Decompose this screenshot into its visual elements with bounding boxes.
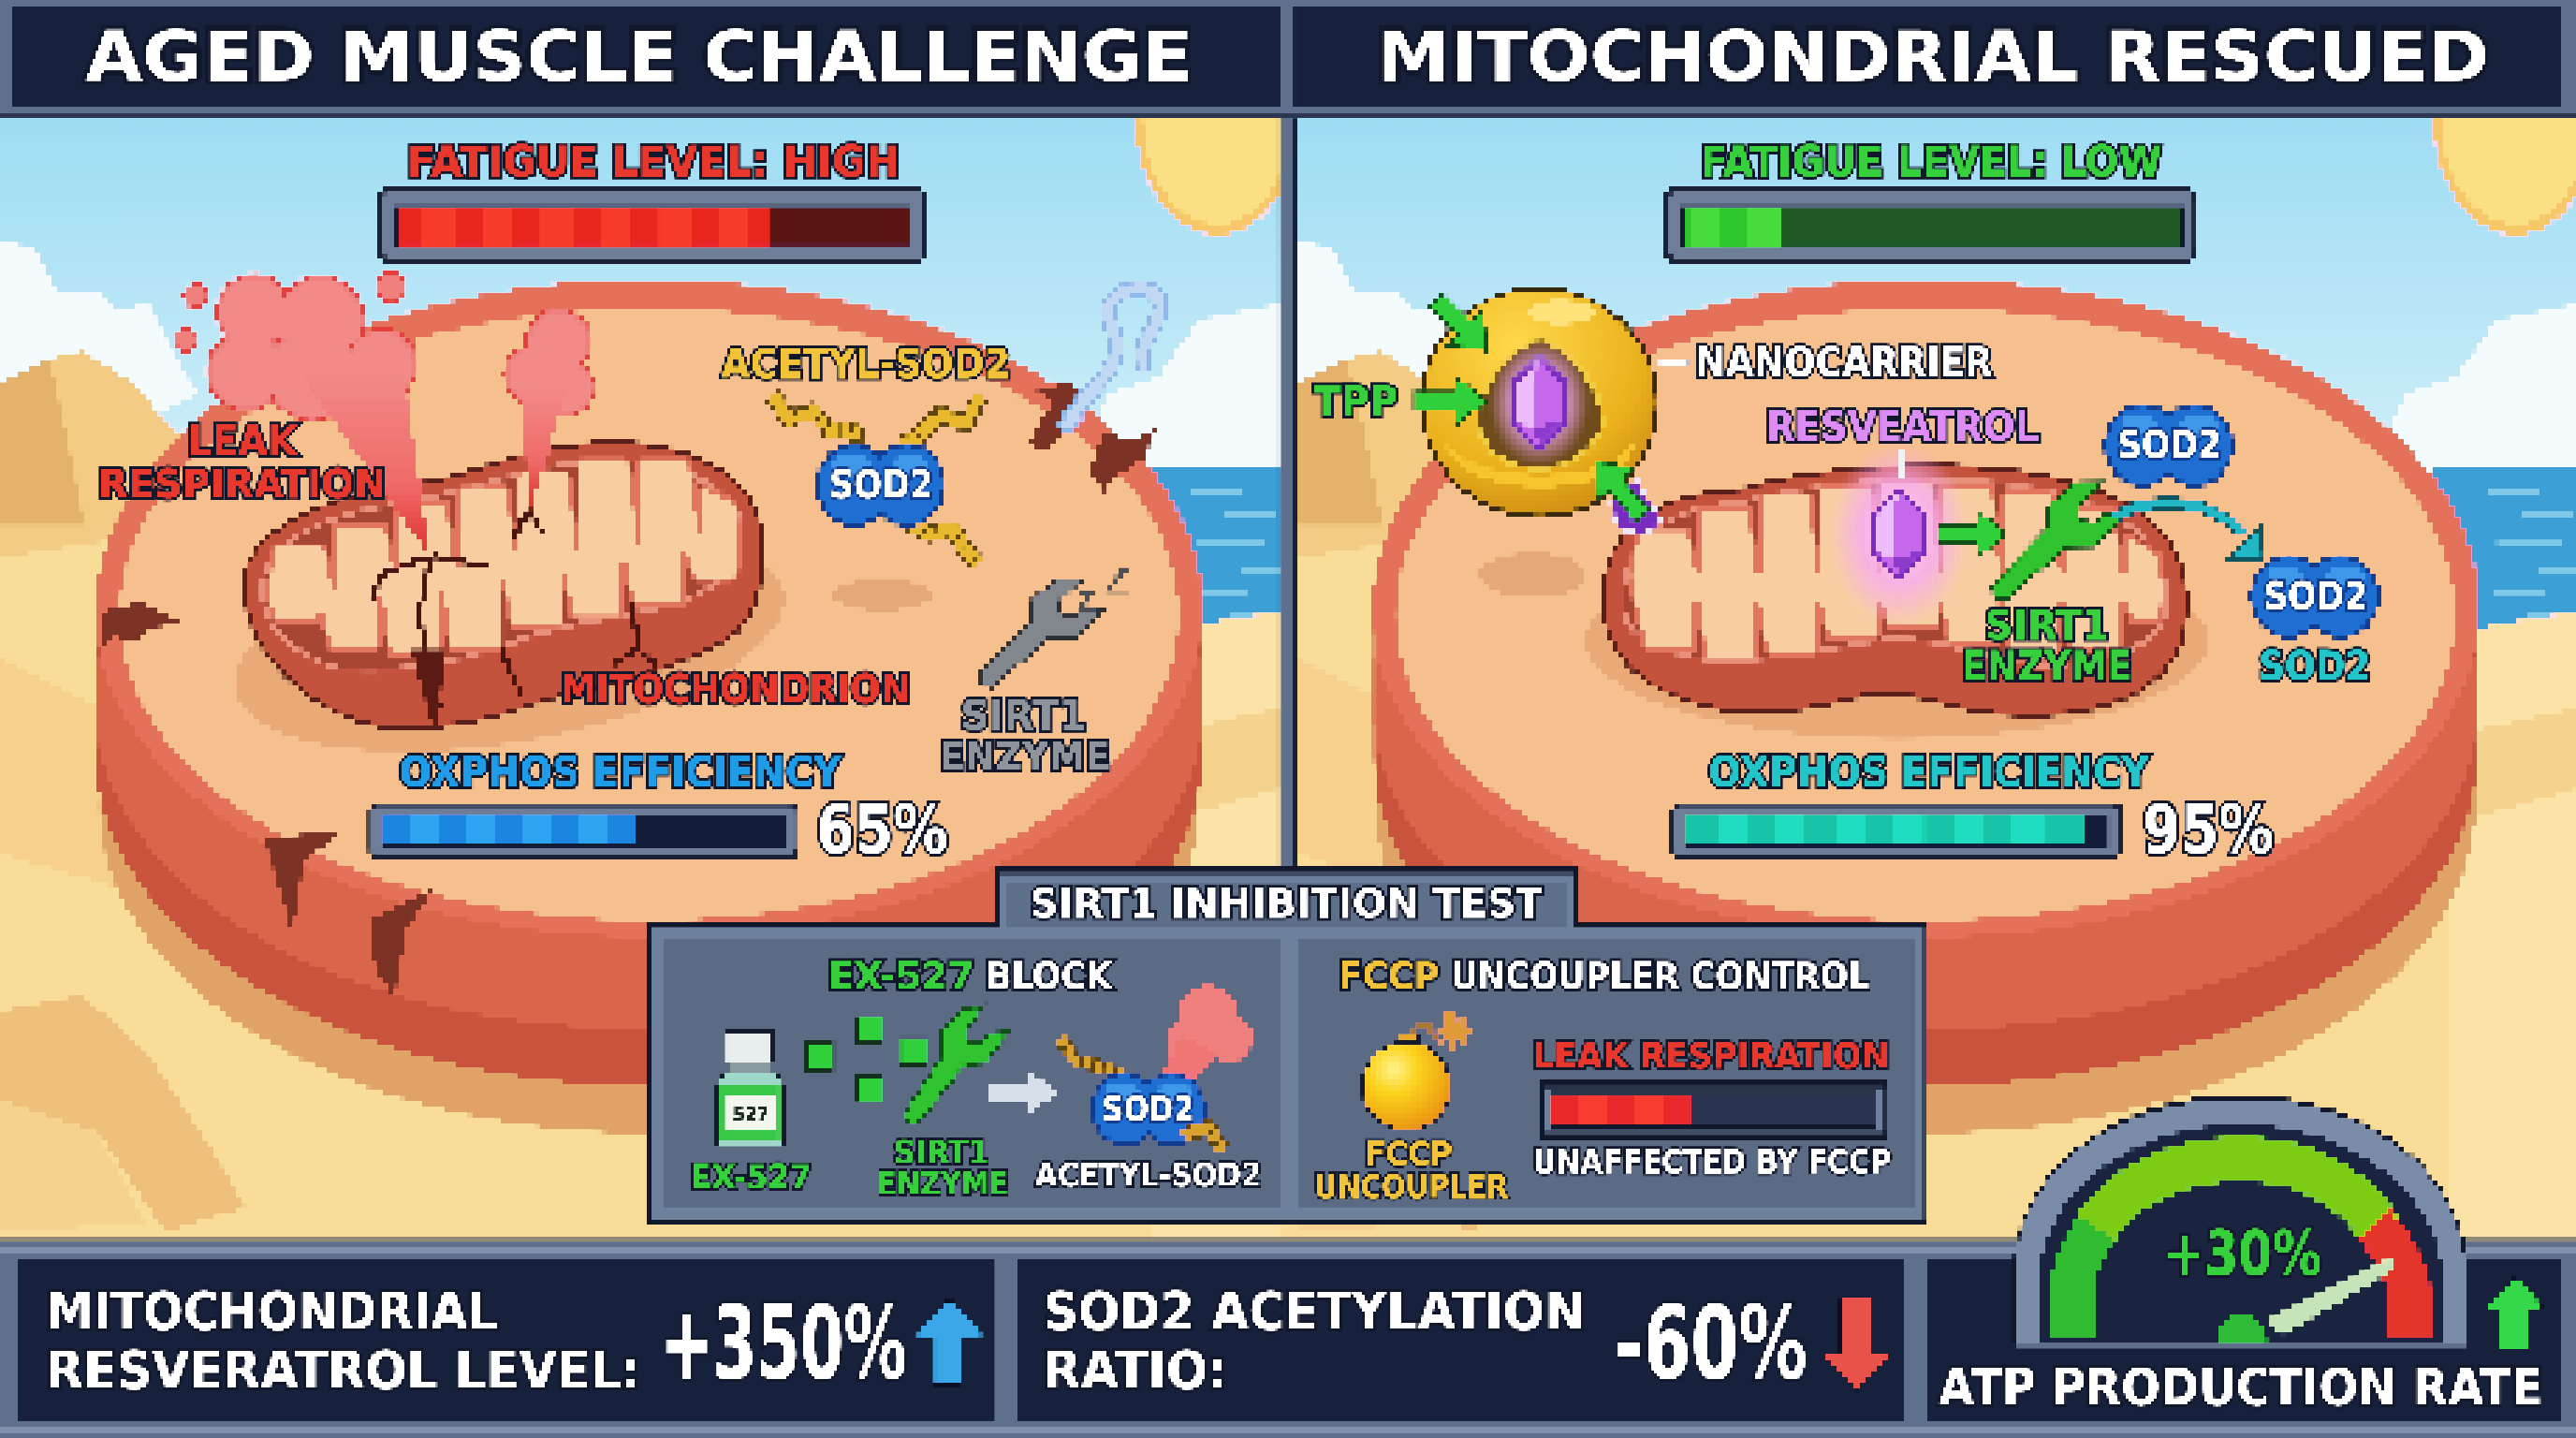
label: TPP: TPP [1314, 378, 1398, 426]
title: aged muscle challenge: AGED MUSCLE CHALLENGE [85, 18, 1193, 97]
stat: ratio: RATIO: [1043, 1341, 1227, 1401]
stat value: -60%: -60% [1615, 1284, 1808, 1403]
label: FCCP under bomb: FCCP [1365, 1135, 1453, 1173]
icon: blue vapor wisp [1068, 288, 1160, 424]
heading: FCCP: FCCP [1339, 955, 1439, 999]
stat: mitochondrial: MITOCHONDRIAL [46, 1282, 498, 1343]
icon: gold nanocarrier with crystal [1414, 282, 1689, 534]
icon: FCCP bomb [1360, 1010, 1473, 1132]
heading: block: BLOCK [986, 955, 1114, 999]
label: OXPHOS left: OXPHOS EFFICIENCY [399, 748, 842, 798]
label: SIRT1 grey: SIRT1 [961, 692, 1086, 740]
label: uncoupler: UNCOUPLER [1314, 1167, 1508, 1206]
label: enzyme green: ENZYME [1962, 643, 2132, 691]
label: resveatrol: RESVEATROL [1766, 403, 2039, 450]
stat: resveratrol level: RESVERATROL LEVEL: [46, 1341, 640, 1401]
disc: aged muscle cell [95, 279, 1203, 1134]
heading: EX-527: EX-527 [828, 955, 974, 999]
label: fatigue low: FATIGUE LEVEL: LOW [1701, 137, 2162, 186]
gauge: OXPHOS efficiency 65 percent [368, 801, 800, 859]
icon: blocked SIRT1 wrench [887, 994, 1013, 1138]
panel: aged muscle scene [0, 118, 1281, 1241]
gauge: ATP production rate [2012, 1094, 2467, 1345]
icon: grey arrow [990, 1071, 1056, 1114]
label: SIRT1 panel: SIRT1 [894, 1134, 989, 1172]
icon: EX-527 vial [716, 1030, 783, 1145]
panel: SIRT1 inhibition test [648, 868, 1928, 1225]
stat: SOD2 acetylation: SOD2 ACETYLATION [1043, 1282, 1586, 1343]
icon: inactive SIRT1 wrench [962, 564, 1131, 706]
divider between scenes [1278, 120, 1298, 1242]
panel: mitochondrial rescued scene [1298, 2, 2576, 1265]
mitochondrion: damaged [236, 439, 786, 753]
value: 65 percent: 65% [816, 790, 948, 869]
label: SOD2 right blob: SOD2 [2264, 573, 2367, 619]
smoke: leak respiration plumes [174, 272, 594, 559]
label: vial 527: 527 [733, 1104, 768, 1125]
gauge: OXPHOS efficiency 95 percent [1671, 801, 2123, 859]
label: EX-527 under vial: EX-527 [690, 1158, 812, 1196]
icon: blue up arrow [916, 1299, 983, 1386]
icon: red down arrow [1823, 1299, 1889, 1390]
heading: uncoupler control: UNCOUPLER CONTROL [1451, 955, 1869, 999]
label: SIRT1 green: SIRT1 [1984, 602, 2110, 650]
gauge value: +30%: +30% [2163, 1217, 2321, 1290]
label: SOD2 on blob: SOD2 [829, 462, 933, 507]
icon: SOD2 deacetylated [2249, 553, 2380, 639]
label: SOD2 teal: SOD2 [2259, 643, 2371, 691]
label: SOD2 panel blob: SOD2 [1103, 1089, 1194, 1129]
label: OXPHOS right: OXPHOS EFFICIENCY [1708, 748, 2150, 798]
frame: bottom stats bar [0, 1239, 2576, 1438]
label: enzyme panel: ENZYME [877, 1165, 1009, 1203]
disc: rescued muscle cell [1372, 279, 2479, 1134]
label: respiration: RESPIRATION [98, 461, 386, 508]
label: fatigue high: FATIGUE LEVEL: HIGH [407, 137, 900, 186]
icon: teal deacetylation arrow [2115, 504, 2262, 559]
mitochondrion: healthy [1586, 465, 2210, 740]
gauge: fatigue bar low [1664, 187, 2198, 263]
gauge: fatigue bar high [378, 187, 929, 263]
label: unaffected by FCCP: UNAFFECTED BY FCCP [1533, 1143, 1891, 1181]
label: enzyme grey: ENZYME [940, 733, 1110, 781]
title: mitochondrial rescued: MITOCHONDRIAL RESCUED [1377, 18, 2489, 97]
heading: SIRT1 inhibition test: SIRT1 INHIBITION TEST [1030, 880, 1543, 926]
label: mitochondrion: MITOCHONDRION [560, 666, 910, 713]
icon: inhibitor particles [807, 1017, 927, 1103]
label: nanocarrier: NANOCARRIER [1695, 339, 1993, 387]
icon: acetylated SOD2 with leak plume [1060, 986, 1251, 1151]
frame: header bar [0, 0, 2576, 120]
value: 95 percent: 95% [2143, 790, 2274, 869]
label: acetyl-SOD2: ACETYL-SOD2 [721, 341, 1010, 389]
stat value: +350%: +350% [661, 1284, 907, 1403]
icon: activated SIRT1 wrench and arrow [1939, 466, 2131, 619]
icon: acetyl chains and SOD2 [772, 394, 981, 564]
label: SOD2 top blob: SOD2 [2117, 422, 2221, 468]
icon: green up arrow [2485, 1277, 2546, 1347]
label: leak: LEAK [187, 418, 300, 465]
label: acetyl-SOD2 panel: ACETYL-SOD2 [1035, 1156, 1262, 1195]
icon: SOD2 free [2103, 403, 2234, 488]
icon: resveratrol crystal in mitochondrion [1830, 442, 1969, 626]
gauge: leak respiration unaffected [1538, 1079, 1889, 1140]
label: leak respiration panel: LEAK RESPIRATION [1533, 1035, 1889, 1078]
